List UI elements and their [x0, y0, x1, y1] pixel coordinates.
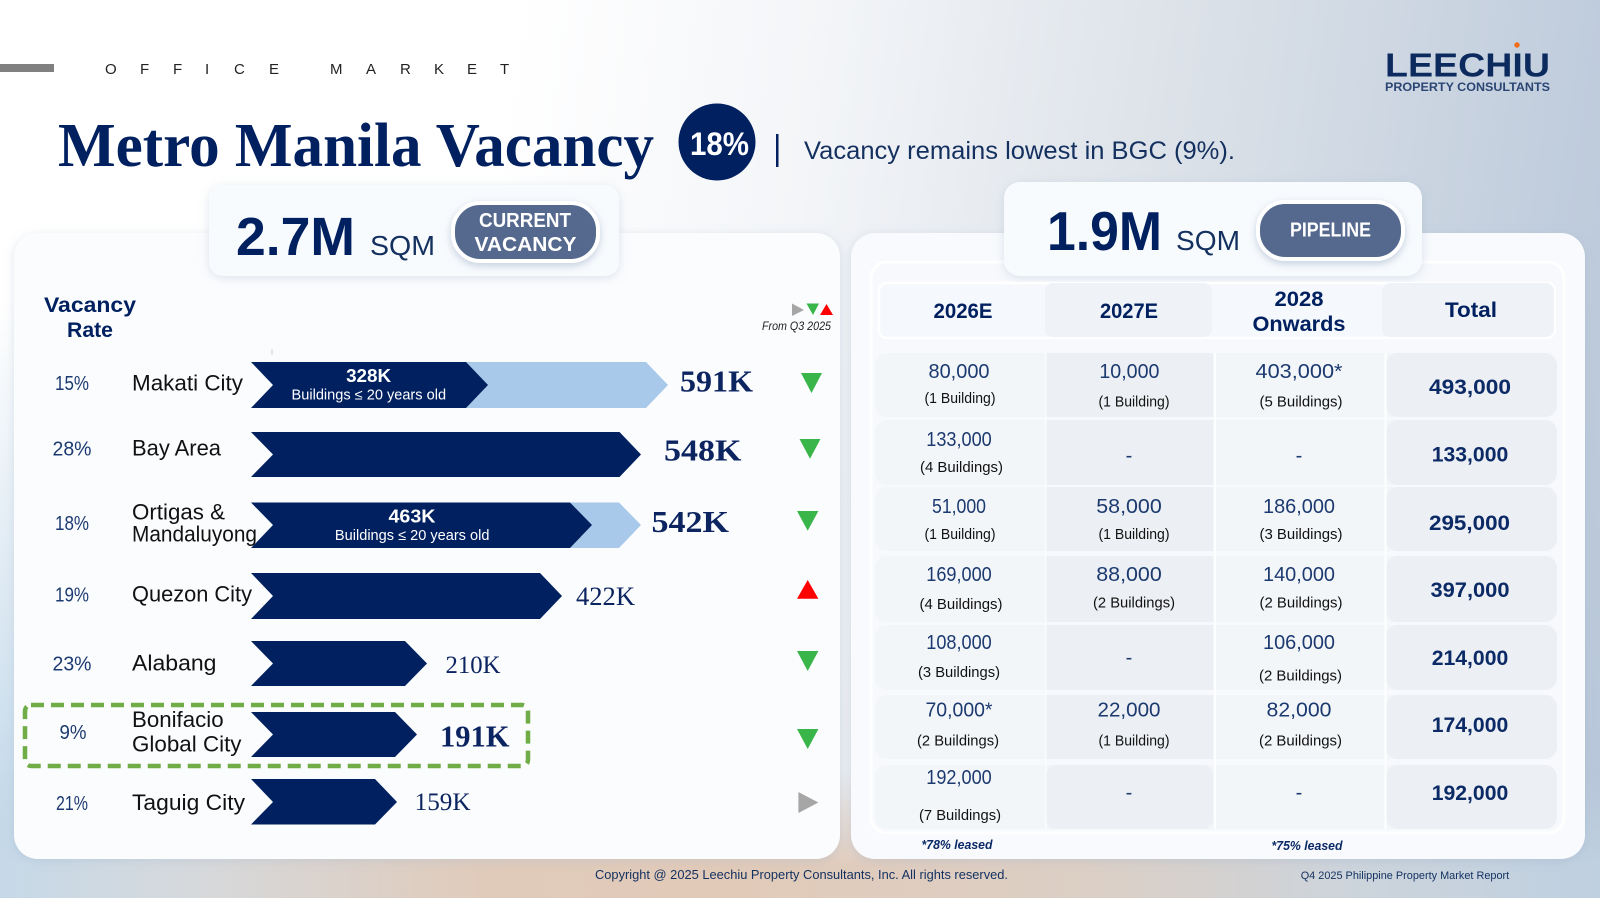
badge: 18%: [678, 104, 756, 180]
divider: [776, 134, 778, 167]
row: Quezon City: [55, 573, 818, 619]
table row 2: 133,000: [926, 429, 992, 451]
column heading: vacancy rate: Vacancy: [44, 294, 136, 317]
card: 2.7M sqm current vacancy: 2.7M: [236, 207, 355, 267]
row: Alabang: 210K: [446, 652, 500, 679]
row: Ortigas and Mandaluyong: Ortigas &: [132, 499, 225, 524]
table row 7: (7 Buildings): [919, 807, 1001, 824]
table row 6: (1 Building): [1098, 733, 1170, 750]
table row 1: 403,000*: [1256, 361, 1343, 383]
card: 1.9M sqm pipeline: [1004, 182, 1422, 276]
table row 6: [875, 695, 1557, 759]
table row 3: 58,000: [1096, 496, 1162, 518]
table row 3: (3 Buildings): [1260, 526, 1343, 543]
row: Taguig City: Taguig City: [132, 790, 245, 815]
subtitle: Vacancy remains lowest in BGC (9%).: [804, 137, 1235, 165]
table row 2: [875, 420, 1557, 485]
row: Taguig City: [56, 779, 818, 824]
section label: office market: OFFICEMARKET: [105, 61, 509, 78]
row: Ortigas and Mandaluyong: 463K: [388, 507, 436, 527]
row: Bay Area: [52, 432, 820, 477]
row: Makati City: [55, 362, 822, 408]
table row 6: 174,000: [1432, 714, 1508, 737]
row: Bonifacio Global City (highlighted): [25, 705, 818, 766]
row: Bonifacio Global City (highlighted): Global City: [132, 732, 242, 757]
legend: change from Q3 2025: From Q3 2025: [762, 321, 832, 333]
table row 3: (1 Building): [924, 526, 996, 543]
table row 4: 169,000: [926, 564, 992, 586]
table row 6: 70,000*: [926, 700, 993, 722]
table header: Onwards: [1252, 313, 1346, 336]
panel: pipeline: [851, 233, 1585, 859]
table row 4: 140,000: [1263, 564, 1335, 586]
table row 1: (1 Building): [1098, 394, 1170, 411]
row: Makati City: Makati City: [132, 371, 243, 396]
table row 1: 493,000: [1429, 376, 1511, 399]
row: Makati City: 328K: [346, 366, 391, 386]
table row 2: (4 Buildings): [920, 459, 1003, 476]
table row 6: (2 Buildings): [917, 733, 999, 750]
row: Ortigas and Mandaluyong: Buildings ≤ 20 years old: [335, 528, 489, 544]
table row 5: (3 Buildings): [918, 664, 1000, 681]
row: Ortigas and Mandaluyong: 542K: [652, 504, 729, 539]
table row 6: 82,000: [1266, 700, 1332, 722]
column heading: vacancy rate: [44, 294, 136, 342]
table row 1: (5 Buildings): [1260, 394, 1343, 411]
row: Makati City: 591K: [680, 364, 753, 399]
table row 6: (2 Buildings): [1259, 733, 1342, 750]
table frame: [871, 262, 1564, 833]
row: Bay Area: 548K: [664, 433, 742, 468]
card: 1.9M sqm pipeline: SQM: [1176, 225, 1240, 256]
badge: 18%: 18%: [690, 126, 749, 162]
card: 2.7M sqm current vacancy: [209, 185, 619, 276]
row: Alabang: Alabang: [132, 651, 216, 676]
table row 5: 214,000: [1432, 647, 1508, 670]
card: 2.7M sqm current vacancy: CURRENT: [479, 210, 571, 232]
table row 7: -: [1296, 782, 1302, 804]
table row 5: -: [1126, 647, 1132, 669]
table row 5: (2 Buildings): [1259, 668, 1342, 685]
table header: 2026E: [934, 300, 992, 323]
table row 6: 22,000: [1098, 700, 1160, 722]
card: 1.9M sqm pipeline: 1.9M: [1047, 200, 1162, 262]
footnote: 75% leased: *75% leased: [1272, 839, 1343, 853]
table row 3: [875, 487, 1557, 551]
row: Ortigas and Mandaluyong: 18%: [55, 513, 89, 535]
logo: Leechiu: [1385, 42, 1550, 94]
row: Alabang: [52, 641, 818, 686]
row: Alabang: 23%: [52, 654, 92, 676]
card: 1.9M sqm pipeline: PIPELINE: [1290, 220, 1371, 242]
table row 3: 186,000: [1263, 496, 1335, 518]
table row 4: (4 Buildings): [920, 596, 1003, 613]
row: Ortigas and Mandaluyong: [55, 499, 818, 548]
legend: change from Q3 2025: [762, 304, 833, 333]
table row 5: [875, 625, 1557, 690]
table row 4: (2 Buildings): [1260, 595, 1343, 612]
row: Quezon City: 19%: [55, 585, 89, 607]
table header: [879, 283, 1555, 338]
table row 3: (1 Building): [1098, 526, 1170, 543]
row: Bonifacio Global City (highlighted): 191K: [440, 719, 510, 754]
table row 1: 10,000: [1099, 361, 1159, 383]
card: 2.7M sqm current vacancy: SQM: [370, 230, 435, 261]
row: Makati City: Buildings ≤ 20 years old: [292, 387, 446, 403]
table row 1: 80,000: [928, 361, 990, 383]
panel: current vacancy: [14, 233, 840, 859]
card: 2.7M sqm current vacancy: VACANCY: [474, 234, 577, 256]
table row 7: 192,000: [1432, 782, 1508, 805]
row: Ortigas and Mandaluyong: Mandaluyong: [132, 522, 257, 547]
table row 4: (2 Buildings): [1093, 595, 1175, 612]
row: Quezon City: Quezon City: [132, 582, 252, 607]
table row 2: 133,000: [1432, 444, 1508, 467]
row: Taguig City: 159K: [415, 789, 471, 816]
logo: Leechiu: LEECHIU: [1385, 47, 1550, 84]
table row 7: 192,000: [926, 767, 992, 789]
footnote: 78% leased: *78% leased: [922, 838, 993, 852]
accent bar: [0, 64, 54, 72]
row: Quezon City: 422K: [576, 582, 635, 611]
column heading: vacancy rate: Rate: [67, 319, 113, 342]
row: Taguig City: 21%: [56, 793, 88, 815]
logo: Leechiu: PROPERTY CONSULTANTS: [1385, 82, 1550, 94]
table header: Total: [1445, 299, 1497, 322]
row: Makati City: 15%: [55, 373, 89, 395]
table row 1: [875, 353, 1557, 417]
table row 3: 51,000: [932, 496, 986, 518]
table row 5: 106,000: [1263, 632, 1335, 654]
table row 3: 295,000: [1429, 512, 1510, 535]
table row 4: 397,000: [1430, 579, 1510, 602]
row: Bonifacio Global City (highlighted): 9%: [60, 722, 87, 744]
table row 5: 108,000: [926, 632, 992, 654]
table row 1: (1 Building): [924, 390, 996, 407]
row: Bonifacio Global City (highlighted): Bonifacio: [132, 707, 224, 732]
title: Metro Manila Vacancy: [58, 112, 654, 180]
table row 2: -: [1126, 445, 1132, 467]
footer: report name: Q4 2025 Philippine Property Market Report: [1301, 870, 1509, 882]
table row 7: [875, 765, 1557, 829]
footer: copyright: Copyright @ 2025 Leechiu Property Consultants, Inc. All rights reserved.: [595, 867, 1008, 882]
table row 7: -: [1126, 782, 1132, 804]
table row 4: [875, 556, 1557, 622]
table row 2: -: [1296, 445, 1302, 467]
table header: 2027E: [1100, 300, 1158, 323]
row: Bay Area: 28%: [52, 439, 92, 461]
table row 4: 88,000: [1096, 564, 1162, 586]
row: Bay Area: Bay Area: [132, 436, 222, 461]
table header: 2028: [1274, 288, 1324, 311]
